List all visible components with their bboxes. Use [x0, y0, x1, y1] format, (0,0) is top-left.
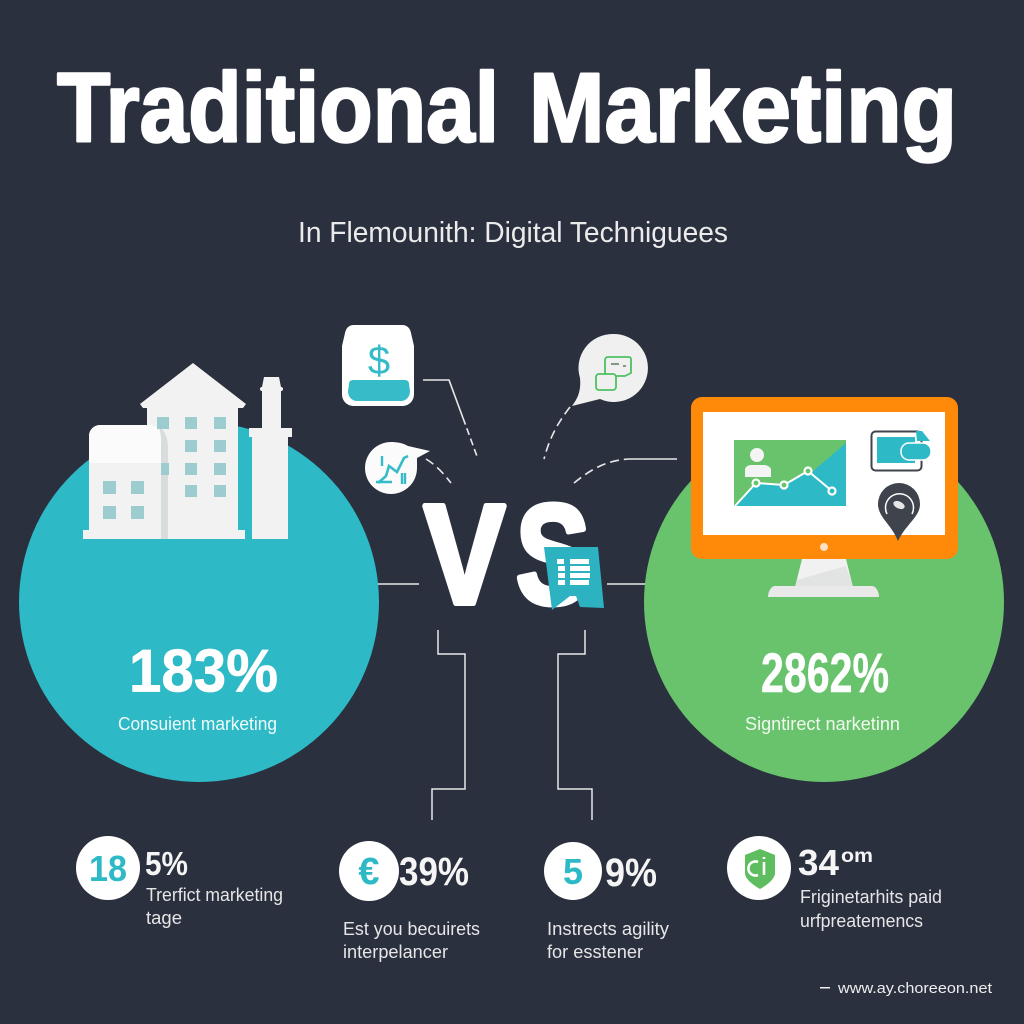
stat block 3: [544, 842, 669, 962]
icon: wallet: [872, 431, 931, 470]
badge: 5: 5: [563, 851, 583, 892]
value: 39%: 39%: [399, 850, 469, 894]
description: Friginetarhits paid: [800, 887, 942, 907]
description: Trerfict marketing: [146, 885, 283, 905]
badge: 18: 18: [89, 848, 127, 889]
vs heading: S: [516, 475, 590, 633]
icon: chat bubble: [572, 334, 648, 406]
connector lines: bottom: [432, 630, 592, 820]
description: [146, 885, 283, 928]
description: [343, 919, 480, 962]
description: for esstener: [547, 942, 643, 962]
icon: list ribbon: [544, 547, 604, 610]
connector lines: top: [378, 380, 677, 584]
vs heading: [424, 475, 590, 633]
value: 9%: 9%: [605, 851, 657, 895]
subtitle: In Flemounith: Digital Techniguees: [298, 217, 728, 249]
title: Traditional: [57, 52, 499, 162]
stat block 4: [727, 836, 942, 931]
badge: shield: [727, 836, 791, 900]
description: Est you becuirets: [343, 919, 480, 939]
label: consuient marketing: Consuient marketing: [118, 714, 277, 734]
badge: 18: [76, 836, 140, 900]
icon: monitor: [691, 397, 958, 597]
chart panel: [734, 440, 846, 506]
stat: 2862%: 2862%: [761, 641, 889, 704]
description: interpelancer: [343, 942, 448, 962]
value: 34om: 34: [798, 842, 839, 883]
badge: euro: [339, 841, 399, 901]
label: signtirect narketinn: Signtirect narketinn: [745, 714, 900, 734]
panel: digital marketing circle: [644, 397, 1004, 782]
green circle: [644, 422, 1004, 782]
title: [57, 52, 957, 162]
description: urfpreatemencs: [800, 911, 923, 931]
description: tage: [146, 908, 182, 928]
icon: dollar card: [342, 325, 414, 406]
badge: euro: €: [358, 851, 380, 893]
value: 34om: om: [841, 846, 873, 867]
description: [800, 887, 942, 931]
panel: traditional marketing circle: [19, 363, 379, 782]
title: Marketing: [529, 52, 957, 162]
description: [547, 919, 669, 962]
icon: map pin: [878, 483, 920, 541]
icon: growth bubble: [365, 442, 430, 494]
icon: dollar card: $: [368, 339, 390, 383]
vs heading: V: [424, 475, 505, 633]
stat block 2: [339, 841, 480, 962]
value: 34om: [798, 842, 873, 883]
footer url: www.ay.choreeon.net: [837, 980, 993, 997]
teal circle: [19, 422, 379, 782]
description: Instrects agility: [547, 919, 669, 939]
value: 5%: 5%: [145, 845, 188, 882]
stat: 183%: 183%: [129, 638, 278, 704]
icon: buildings: [83, 363, 292, 539]
stat block 1: [76, 836, 283, 928]
